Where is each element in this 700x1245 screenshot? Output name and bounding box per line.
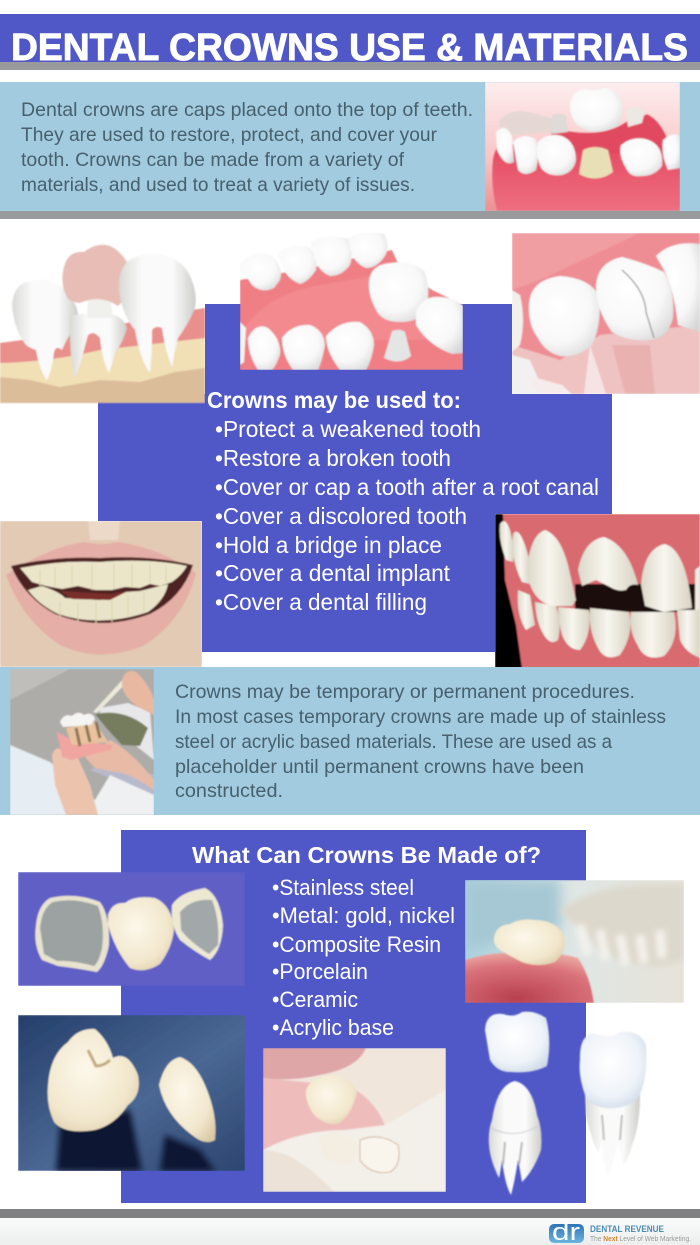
panel: crown uses (purple) [98,304,612,652]
list: crown uses: •Cover a dental implant [215,560,451,586]
image: tooth bridge with pink crown [0,244,205,404]
text: temporary or permanent: constructed. [175,780,283,802]
list: crown uses [215,416,599,615]
text: temporary or permanent: Crowns may be temporary or permanent procedures. [175,681,635,703]
image: metal-lined bridge on purple cloth [18,872,245,986]
footer [0,1209,700,1245]
text: temporary or permanent: steel or acrylic based materials. These are used as a [175,731,612,753]
text: temporary or permanent [175,681,666,802]
image: smiling mouth [0,521,202,667]
image: crown above prepared tooth [485,82,680,211]
panel: introduction [0,82,700,219]
image: dentist holding tooth model [10,669,154,815]
text: temporary or permanent: placeholder until permanent crowns have been [175,756,584,778]
list: materials: •Metal: gold, nickel [272,903,455,928]
intro text [21,99,473,196]
list: materials: •Stainless steel [272,875,414,900]
list: crown uses: •Hold a bridge in place [215,532,442,558]
title: DENTAL CROWNS USE & MATERIALS [11,27,688,69]
heading: crowns may be used to: Crowns may be used to: [207,387,461,413]
logo: dental revenue [549,1219,691,1245]
list: materials: •Porcelain [272,959,368,984]
panel: crown materials (purple) [121,830,586,1203]
list: materials: •Ceramic [272,987,358,1012]
list: crown uses: •Cover or cap a tooth after a root canal [215,474,599,500]
image: crown on fingertip [465,880,684,1003]
logo: dental revenue: DENTAL REVENUE [590,1224,664,1234]
list: crown uses: •Cover a discolored tooth [215,503,467,529]
intro text: Dental crowns are caps placed onto the top of teeth. [21,99,473,121]
list: materials: •Composite Resin [272,932,441,957]
logo: dental revenue: The Next Level of Web Marketing. [590,1234,691,1243]
list: crown uses: •Restore a broken tooth [215,445,451,471]
panel: temporary or permanent crowns [0,667,700,815]
intro text: materials, and used to treat a variety of issues. [21,174,415,196]
intro text: They are used to restore, protect, and cover your [21,124,437,146]
list: materials: •Acrylic base [272,1015,394,1040]
heading: what can crowns be made of: What Can Crowns Be Made of? [192,842,541,868]
image: white crown and tooth illustration [485,1012,549,1195]
image: two ceramic crowns on blue [18,1015,245,1171]
list: crown uses: •Cover a dental filling [215,589,427,615]
list: materials [272,875,455,1040]
title banner [0,14,700,70]
image: full tooth with crown and roots [580,1032,646,1177]
text: temporary or permanent: In most cases temporary crowns are made up of stainless [175,706,666,728]
list: crown uses: •Protect a weakened tooth [215,416,481,442]
image: cracked tooth [512,233,700,394]
intro text: tooth. Crowns can be made from a variety of [21,149,405,171]
image: broken front tooth [495,514,700,667]
image: molar crown over prepared tooth [240,234,463,370]
image: crown held by fingers over plaster cast [263,1048,446,1192]
